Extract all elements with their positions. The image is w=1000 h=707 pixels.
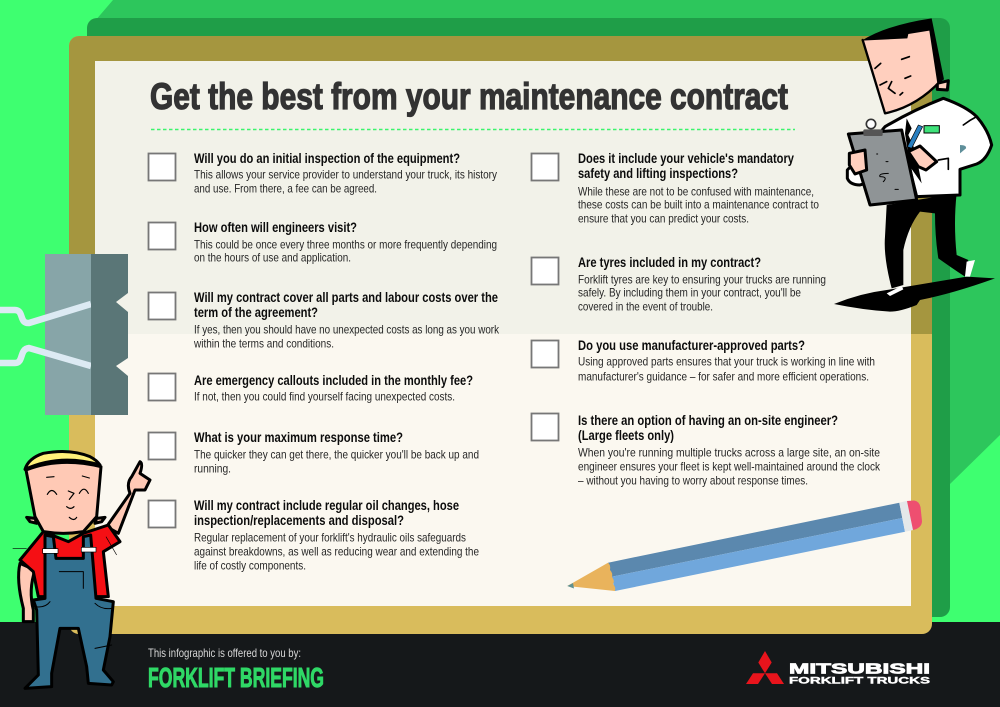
footer band xyxy=(0,622,1000,707)
checklist item 8: Are tyres included in my contract? xyxy=(578,255,761,270)
checklist item 2 xyxy=(148,220,497,264)
checklist item 10: – without you having to worry about response times. xyxy=(578,474,808,488)
checklist item 10: (Large fleets only) xyxy=(578,428,674,443)
checklist item 8: Forklift tyres are key to ensuring your trucks are running xyxy=(578,274,826,286)
illustration: mechanic pointing xyxy=(13,451,150,688)
checklist item 9 xyxy=(532,338,875,384)
checklist item 7: safety and lifting inspections? xyxy=(578,166,738,181)
checklist item 4: Are emergency callouts included in the monthly fee? xyxy=(194,373,473,388)
title divider xyxy=(151,128,795,130)
icon: pencil xyxy=(567,500,922,591)
checklist item 2: on the hours of use and application. xyxy=(194,252,351,264)
checklist item 1: Will you do an initial inspection of the equipment? xyxy=(194,151,460,166)
checklist item 2: How often will engineers visit? xyxy=(194,220,357,235)
checklist item 1 xyxy=(148,151,497,196)
checklist item 1: This allows your service provider to understand your truck, its history xyxy=(194,168,497,182)
checklist item 2: This could be once every three months or more frequently depending xyxy=(194,238,497,252)
checklist item 6: inspection/replacements and disposal? xyxy=(194,513,404,528)
checklist item 5: running. xyxy=(194,462,231,476)
checklist item 3 xyxy=(148,290,499,350)
checklist item 4 xyxy=(148,373,473,404)
checklist item 3: term of the agreement? xyxy=(194,305,318,320)
illustration: engineer with clipboard xyxy=(834,18,995,312)
checklist item 6: against breakdowns, as well as reducing wear and extending the xyxy=(194,546,479,558)
checklist item 5 xyxy=(148,430,479,476)
checklist item 7: ensure that you can predict your costs. xyxy=(578,212,749,226)
checklist item 7 xyxy=(532,151,819,226)
checklist item 4: If not, then you could find yourself facing unexpected costs. xyxy=(194,390,455,404)
checklist item 7: Does it include your vehicle's mandatory xyxy=(578,151,794,166)
checklist item 3: within the terms and conditions. xyxy=(193,338,334,350)
checklist item 5: The quicker they can get there, the quicker you'll be back up and xyxy=(194,448,479,462)
checklist item 10: Is there an option of having an on-site engineer? xyxy=(578,413,838,428)
checklist item 6: Regular replacement of your forklift's hydraulic oils safeguards xyxy=(194,532,466,544)
checklist item 5: What is your maximum response time? xyxy=(194,430,403,445)
checklist item 9: manufacturer's guidance – for safer and more efficient operations. xyxy=(578,370,869,384)
checklist item 6 xyxy=(148,498,479,572)
checklist item 3: Will my contract cover all parts and labour costs over the xyxy=(194,290,498,305)
checklist item 8: covered in the event of trouble. xyxy=(578,300,713,314)
checklist item 10 xyxy=(532,413,880,488)
checklist item 3: If yes, then you should have no unexpected costs as long as you work xyxy=(194,324,499,336)
checklist item 1: and use. From there, a fee can be agreed. xyxy=(194,182,377,196)
Mitsubishi Forklift Trucks logo: FORKLIFT TRUCKS xyxy=(789,676,930,686)
checklist item 9: Do you use manufacturer-approved parts? xyxy=(578,338,805,353)
checklist item 8: safely. By including them in your contract, you'll be xyxy=(578,286,801,300)
Forklift Briefing logo: FORKLIFT BRIEFING xyxy=(148,662,324,693)
clipboard board xyxy=(69,36,932,634)
checklist item 6: life of costly components. xyxy=(194,560,306,572)
checklist item 6: Will my contract include regular oil changes, hose xyxy=(194,498,459,513)
Mitsubishi Forklift Trucks logo xyxy=(746,651,930,686)
Mitsubishi Forklift Trucks logo: MITSUBISHI xyxy=(789,660,930,678)
paper clip xyxy=(0,254,128,415)
checklist item 10: engineer ensures your fleet is kept well-maintained around the clock xyxy=(578,460,880,474)
checklist item 7: these costs can be built into a maintenance contract to xyxy=(578,198,819,212)
checklist item 10: When you're running multiple trucks across a large site, an on-site xyxy=(578,446,880,460)
footer offer line: This infographic is offered to you by: xyxy=(148,646,301,660)
title: Get the best from your maintenance contract xyxy=(150,75,788,117)
checklist item 9: Using approved parts ensures that your truck is working in line with xyxy=(578,356,875,368)
checklist item 8 xyxy=(532,255,826,314)
checklist item 7: While these are not to be confused with maintenance, xyxy=(578,186,814,198)
